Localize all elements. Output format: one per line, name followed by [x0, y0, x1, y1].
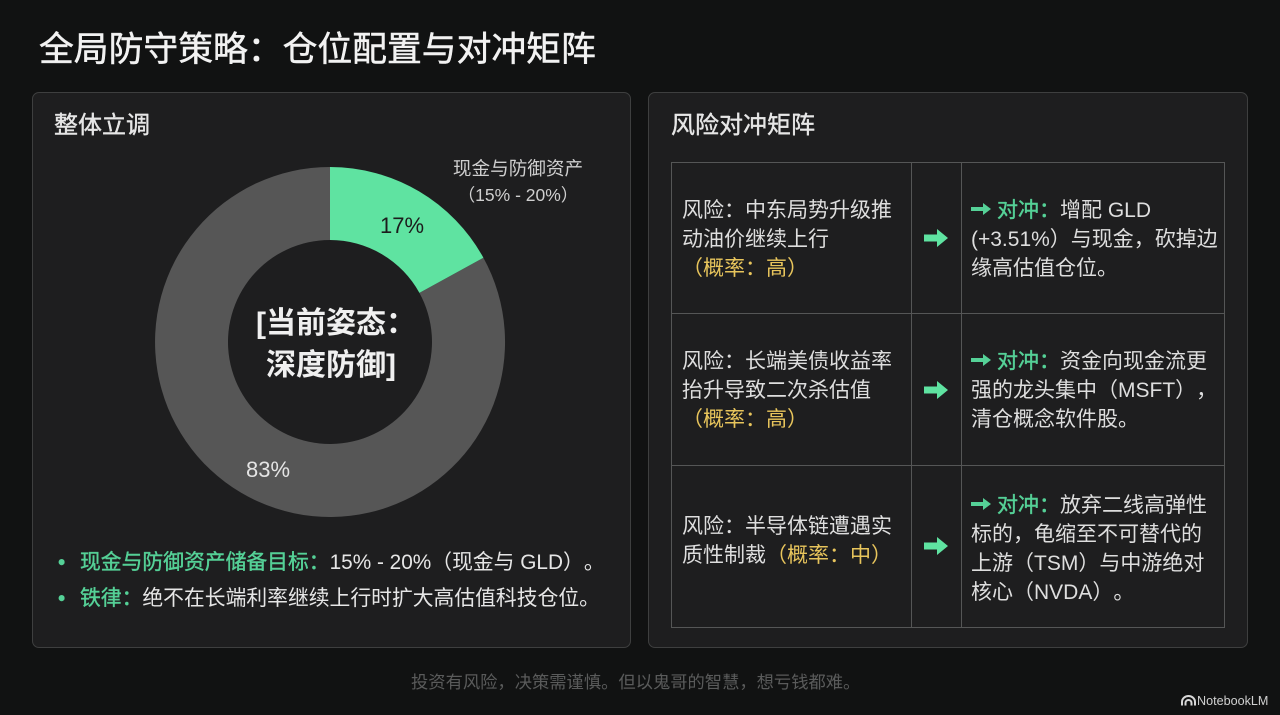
- bullet: iron rule: •: [58, 587, 65, 610]
- segment: 83%: [155, 167, 505, 517]
- donut centre text: [当前姿态：: [256, 307, 416, 340]
- row 1 hedge: (+3.51%）与现金，砍掉边: [971, 228, 1218, 251]
- heading: risk hedge matrix: 风险对冲矩阵: [671, 112, 815, 139]
- row 2 risk: （概率：高）: [682, 408, 808, 431]
- title: 全局防守策略：仓位配置与对冲矩阵: [39, 30, 596, 69]
- value label: 83%: 83%: [246, 457, 290, 482]
- row 3 arrow: [924, 537, 948, 555]
- legend callout: [453, 158, 583, 205]
- bullet list: [58, 550, 605, 610]
- row 1 risk: （概率：高）: [682, 257, 808, 280]
- row 1 risk: 风险：中东局势升级推: [682, 199, 892, 222]
- row 3 risk: 质性制裁（概率：中）: [682, 544, 892, 567]
- row 3 risk: 风险：半导体链遭遇实: [682, 515, 892, 538]
- donut centre text: [256, 307, 416, 382]
- donut chart: [155, 158, 583, 517]
- row 2 arrow: [924, 381, 948, 399]
- legend callout: 现金与防御资产: [453, 158, 583, 179]
- legend callout: （15% - 20%）: [458, 185, 578, 205]
- row 1 hedge: 缘高估值仓位。: [971, 257, 1118, 280]
- icon: NotebookLM logo: [1181, 695, 1196, 706]
- row 2 risk: 风险：长端美债收益率: [682, 350, 892, 373]
- footer disclaimer: 投资有风险，决策需谨慎。但以鬼哥的智慧，想亏钱都难。: [411, 672, 860, 692]
- row 3 hedge: 标的，龟缩至不可替代的: [971, 523, 1202, 546]
- row 1 hedge: [971, 198, 1218, 280]
- row 2 risk: [682, 350, 892, 431]
- donut centre text: 深度防御]: [266, 349, 396, 382]
- row 2 hedge: [971, 350, 1217, 431]
- row 3 hedge: 上游（TSM）与中游绝对: [971, 552, 1204, 575]
- NotebookLM watermark: [1181, 694, 1268, 708]
- segment: 17%: [330, 167, 483, 293]
- heading: overall stance: 整体立调: [54, 112, 150, 139]
- panel: risk hedge matrix: [648, 92, 1248, 648]
- row 2 hedge: 对冲：资金向现金流更: [997, 350, 1207, 373]
- row 1 arrow: [924, 229, 948, 247]
- matrix table: [671, 162, 1225, 628]
- row 3 hedge: [971, 494, 1207, 604]
- row 3 hedge: 核心（NVDA）。: [971, 581, 1134, 604]
- value label: 17%: 17%: [380, 213, 424, 238]
- row 3 risk: [682, 515, 892, 567]
- row 1 risk: [682, 199, 892, 280]
- row 2 hedge: 清仓概念软件股。: [971, 408, 1139, 431]
- bullet: reserve target: •: [58, 551, 65, 574]
- row 2 risk: 抬升导致二次杀估值: [682, 379, 871, 402]
- row 2 hedge: 强的龙头集中（MSFT），: [971, 379, 1217, 402]
- bullet: iron rule: 铁律：绝不在长端利率继续上行时扩大高估值科技仓位。: [80, 587, 600, 610]
- row 1 risk: 动油价继续上行: [682, 228, 829, 251]
- row 3 hedge: 对冲：放弃二线高弹性: [997, 494, 1207, 517]
- wordmark: NotebookLM: [1197, 694, 1268, 708]
- row 1 hedge: 对冲：增配 GLD: [997, 199, 1151, 222]
- panel: overall stance: [32, 92, 631, 648]
- bullet: reserve target: 现金与防御资产储备目标：15% - 20%（现金与 GLD）。: [80, 551, 605, 574]
